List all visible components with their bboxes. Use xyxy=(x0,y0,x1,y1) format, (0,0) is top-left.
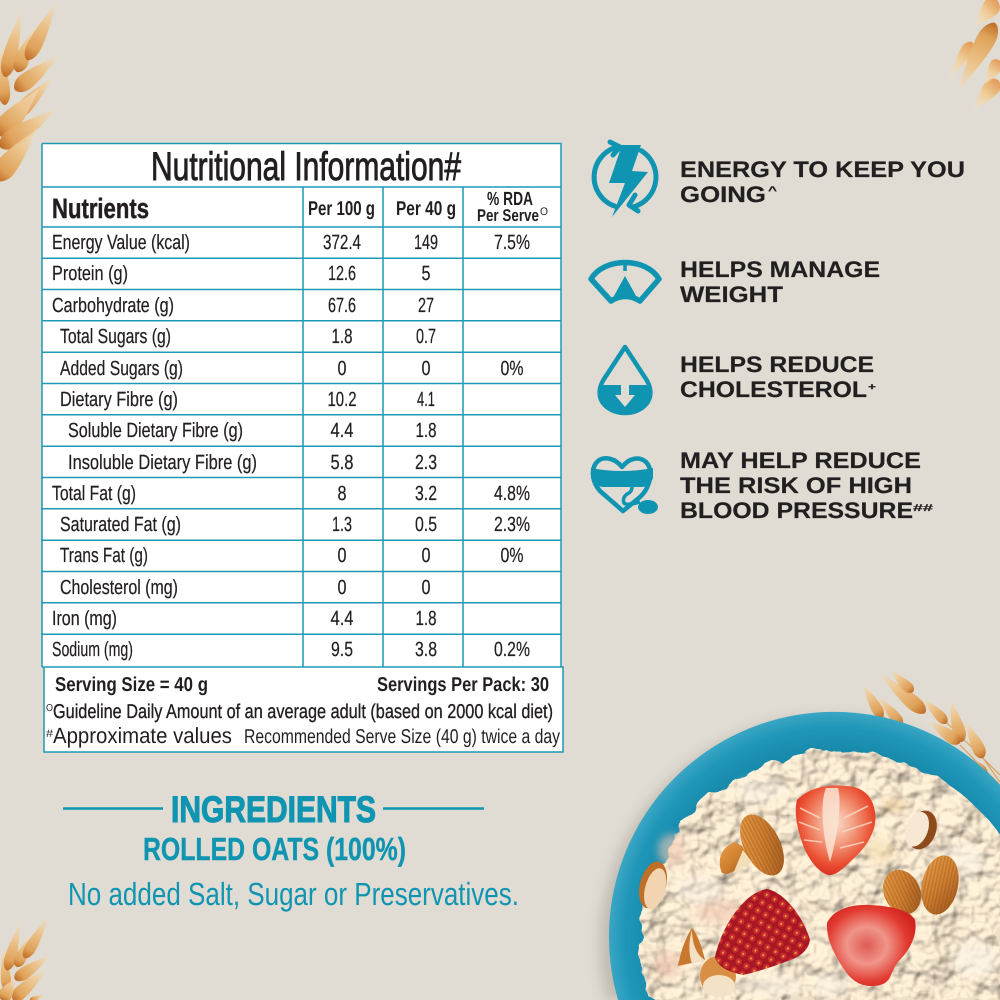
row: sodium: 9.5 xyxy=(331,638,353,661)
row: soluble fibre: Soluble Dietary Fibre (g) xyxy=(68,419,243,442)
benefit: blood pressure xyxy=(680,448,934,523)
row: trans fat: 0 xyxy=(422,544,430,567)
benefit: blood pressure: ## xyxy=(913,503,934,514)
footnotes xyxy=(46,701,560,748)
row: total fat: 8 xyxy=(338,482,346,505)
row: protein xyxy=(52,262,430,285)
row: added sugars xyxy=(60,357,524,380)
column headings: Nutrients xyxy=(52,193,149,224)
row: carbohydrate: 67.6 xyxy=(328,294,356,317)
ingredients heading: INGREDIENTS xyxy=(171,789,376,830)
benefit: energy: ENERGY TO KEEP YOU xyxy=(680,157,965,182)
ingredients section xyxy=(63,789,519,912)
row: insoluble fibre: Insoluble Dietary Fibre (g) xyxy=(68,451,257,474)
row: total sugars: 1.8 xyxy=(332,325,352,348)
benefit: weight xyxy=(680,257,880,307)
row: saturated fat: 1.3 xyxy=(332,513,352,536)
benefit: cholesterol: CHOLESTEROL xyxy=(680,377,867,402)
footnotes: O xyxy=(46,703,53,714)
row: protein: 12.6 xyxy=(328,262,356,285)
row: sodium: 0.2% xyxy=(494,638,530,661)
row: cholesterol xyxy=(60,576,430,599)
row: total fat: Total Fat (g) xyxy=(52,482,136,505)
row: added sugars: 0 xyxy=(338,357,346,380)
oat sprig: bottom left xyxy=(0,913,55,1000)
column headings: Per Serve xyxy=(477,206,539,225)
row: protein: 5 xyxy=(422,262,430,285)
icon: weight scale xyxy=(591,262,659,301)
column headings xyxy=(52,189,548,225)
serving information xyxy=(55,674,549,696)
row: saturated fat: Saturated Fat (g) xyxy=(60,513,181,536)
benefit: blood pressure: MAY HELP REDUCE xyxy=(680,448,921,473)
oat sprig: top left xyxy=(0,0,65,187)
ingredient: rolled oats: ROLLED OATS (100%) xyxy=(143,831,406,867)
row: sodium xyxy=(52,638,530,661)
no additives note: No added Salt, Sugar or Preservatives. xyxy=(68,876,519,912)
table grid xyxy=(41,144,563,752)
benefit: cholesterol: + xyxy=(868,382,876,393)
row: saturated fat: 0.5 xyxy=(415,513,437,536)
row: cholesterol: 0 xyxy=(422,576,430,599)
row: cholesterol: Cholesterol (mg) xyxy=(60,576,178,599)
row: sodium: Sodium (mg) xyxy=(52,638,133,661)
row: dietary fibre: 10.2 xyxy=(328,388,356,411)
row: total fat: 3.2 xyxy=(415,482,437,505)
row: dietary fibre: 4.1 xyxy=(417,388,435,411)
row: insoluble fibre: 5.8 xyxy=(330,451,354,474)
footnotes: Recommended Serve Size (40 g) twice a day xyxy=(244,726,560,748)
row: added sugars: 0% xyxy=(500,357,524,380)
benefit: energy: GOING xyxy=(680,182,766,207)
row: trans fat: 0% xyxy=(500,544,524,567)
benefit: energy xyxy=(680,157,965,207)
table title: Nutritional Information# xyxy=(151,145,462,189)
row: protein: Protein (g) xyxy=(52,262,128,285)
row: trans fat: Trans Fat (g) xyxy=(60,544,148,567)
almond: split right xyxy=(900,806,942,854)
benefit: energy: ^ xyxy=(768,185,778,197)
benefit: cholesterol: HELPS REDUCE xyxy=(680,352,874,377)
column headings: Per 40 g xyxy=(396,198,456,220)
benefit: blood pressure: THE RISK OF HIGH xyxy=(680,473,912,498)
icon: cholesterol drop xyxy=(599,347,651,414)
almond: split left xyxy=(634,858,672,912)
almond: chip lower left xyxy=(678,928,705,966)
row: energy: 149 xyxy=(414,231,438,254)
icon: energy xyxy=(594,142,656,217)
footnotes: Approximate values xyxy=(53,723,232,748)
column headings: Per 100 g xyxy=(308,198,375,220)
row: total sugars: 0.7 xyxy=(416,325,436,348)
row: iron: Iron (mg) xyxy=(52,607,117,630)
row: soluble fibre: 1.8 xyxy=(416,419,436,442)
row: insoluble fibre xyxy=(68,451,437,474)
row: energy: 372.4 xyxy=(323,231,361,254)
oat sprig: top right xyxy=(945,0,1000,115)
benefit: blood pressure: BLOOD PRESSURE xyxy=(680,498,913,523)
row: insoluble fibre: 2.3 xyxy=(415,451,437,474)
row: iron xyxy=(52,607,436,630)
almond: whole upper left xyxy=(731,807,793,883)
strawberry: whole with seeds xyxy=(715,889,810,975)
strawberry: cut top xyxy=(796,785,875,875)
row: trans fat xyxy=(60,544,524,567)
column headings: % RDA xyxy=(487,189,533,210)
row: dietary fibre: Dietary Fibre (g) xyxy=(60,388,178,411)
row: soluble fibre xyxy=(68,419,436,442)
almond: round xyxy=(876,864,928,920)
porridge bowl xyxy=(600,712,1000,1000)
row: total fat: 4.8% xyxy=(494,482,530,505)
serving information: Servings Per Pack: 30 xyxy=(377,674,549,696)
row: energy: Energy Value (kcal) xyxy=(52,231,190,254)
row: carbohydrate: 27 xyxy=(418,294,434,317)
footnotes: Guideline Daily Amount of an average adult (based on 2000 kcal diet) xyxy=(53,701,553,723)
almond: chip bottom xyxy=(700,956,736,997)
row: total sugars xyxy=(60,325,436,348)
footnotes: # xyxy=(46,728,54,740)
row: added sugars: Added Sugars (g) xyxy=(60,357,183,380)
row: energy: 7.5% xyxy=(494,231,530,254)
oats xyxy=(641,752,1000,1000)
row: total fat xyxy=(52,482,530,505)
row: total sugars: Total Sugars (g) xyxy=(60,325,171,348)
row: energy xyxy=(52,231,530,254)
row: soluble fibre: 4.4 xyxy=(330,419,354,442)
strawberry: cut lower right xyxy=(827,905,916,986)
oat sprig: behind bowl xyxy=(857,666,1000,790)
row: trans fat: 0 xyxy=(338,544,346,567)
benefit: weight: WEIGHT xyxy=(680,282,783,307)
table background xyxy=(42,143,563,752)
column headings: O xyxy=(540,206,548,218)
row: saturated fat: 2.3% xyxy=(494,513,530,536)
benefit: weight: HELPS MANAGE xyxy=(680,257,880,282)
almond: whole right xyxy=(916,852,964,918)
bowl xyxy=(609,712,1000,1000)
benefit: cholesterol xyxy=(680,352,876,402)
row: saturated fat xyxy=(60,513,530,536)
icon: heart with blood pressure cuff xyxy=(591,458,658,514)
row: added sugars: 0 xyxy=(422,357,430,380)
serving information: Serving Size = 40 g xyxy=(55,674,208,696)
row: carbohydrate: Carbohydrate (g) xyxy=(52,294,174,317)
bowl shadow xyxy=(600,717,1000,1000)
row: iron: 1.8 xyxy=(416,607,436,630)
almond: small half xyxy=(720,842,752,874)
nutrition table xyxy=(41,143,563,752)
row: carbohydrate xyxy=(52,294,434,317)
row: dietary fibre xyxy=(60,388,435,411)
row: iron: 4.4 xyxy=(330,607,354,630)
row: cholesterol: 0 xyxy=(338,576,346,599)
row: sodium: 3.8 xyxy=(415,638,437,661)
